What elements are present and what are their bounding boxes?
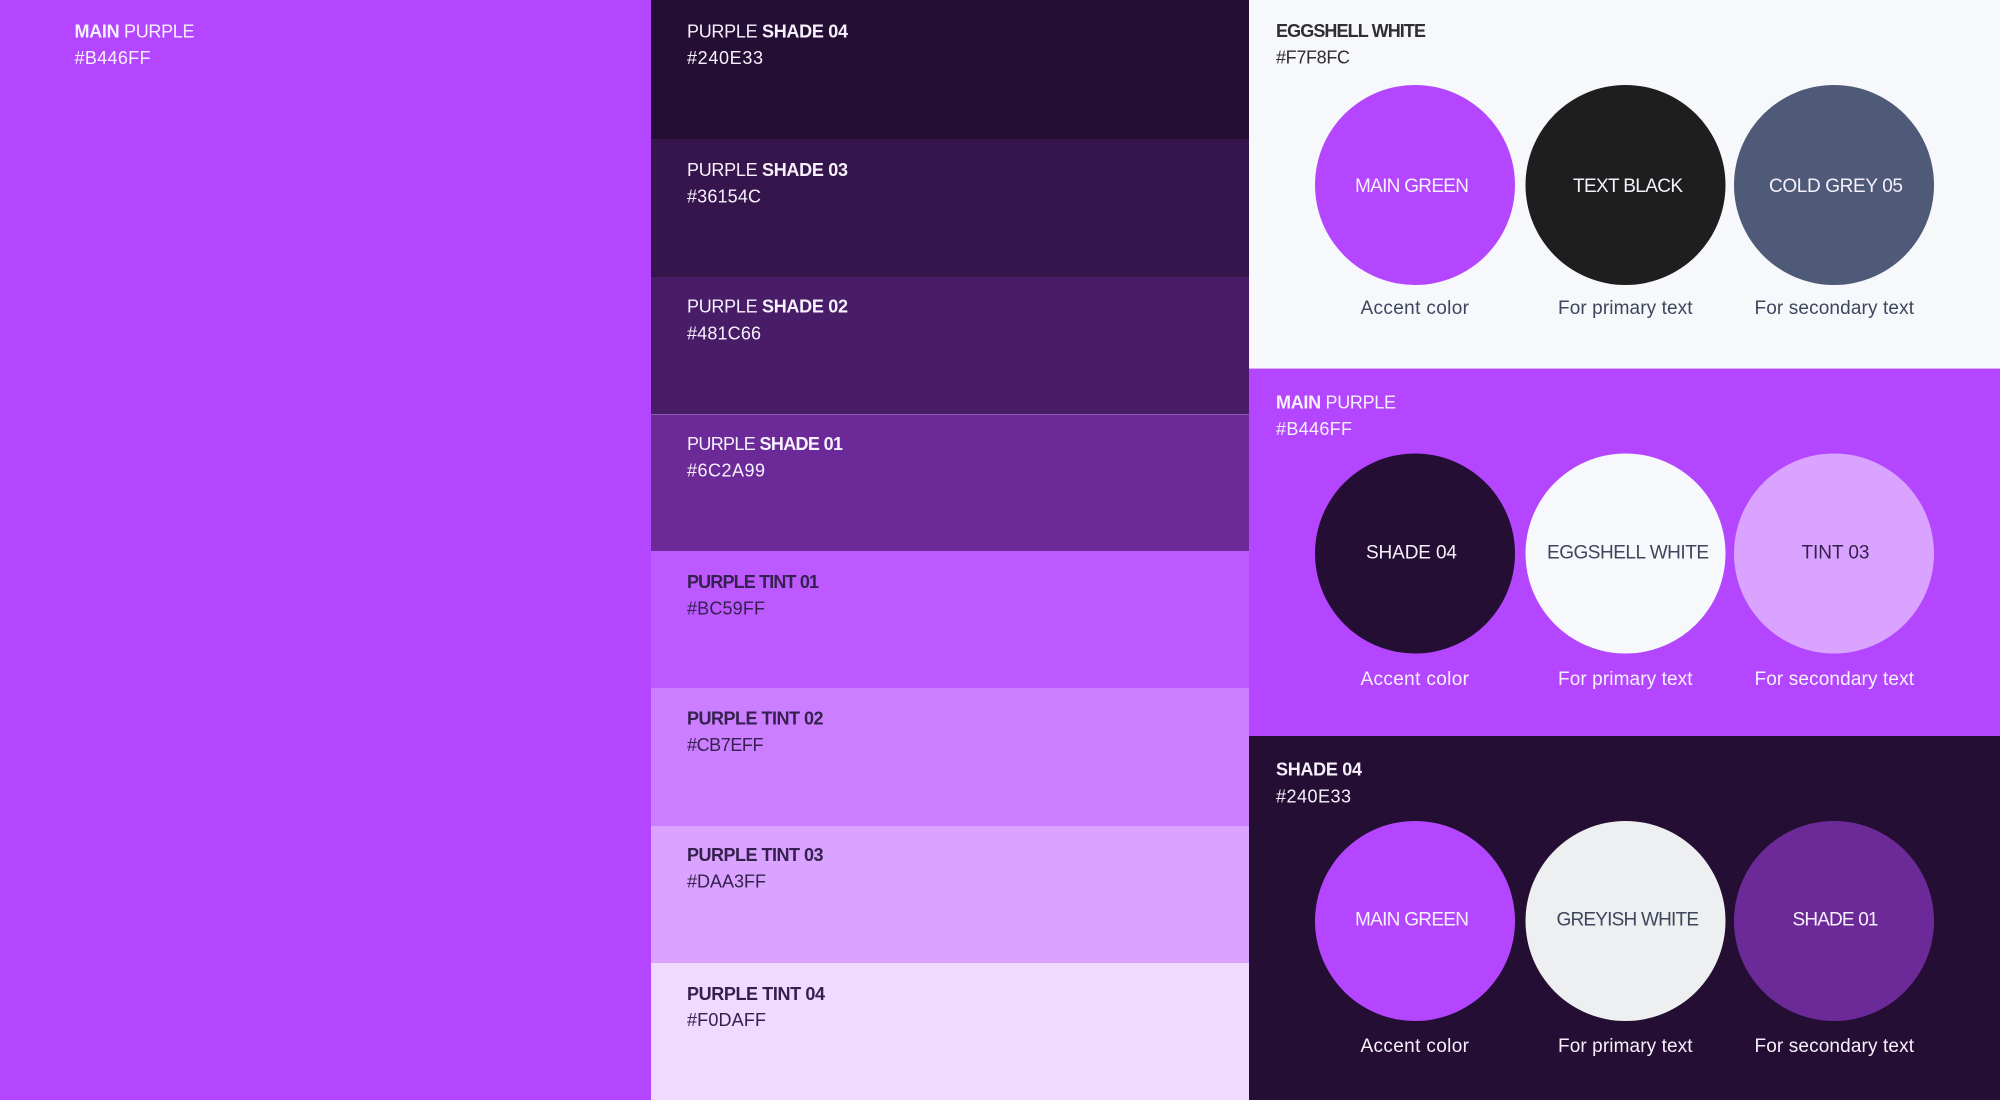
swatch: purple shade 02 bbox=[651, 277, 1249, 414]
captions: Accent color bbox=[1360, 669, 1470, 690]
swatch: purple tint 02: #CB7EFF bbox=[687, 735, 764, 755]
circle: shade 04: SHADE 04 bbox=[1366, 542, 1457, 564]
panel: main purple: MAIN PURPLE bbox=[74, 22, 194, 42]
captions bbox=[1360, 1036, 1915, 1057]
swatch: purple tint 04: #F0DAFF bbox=[687, 1010, 766, 1030]
heading: shade 04 bbox=[1276, 760, 1362, 806]
captions: For primary text bbox=[1558, 669, 1693, 690]
circle: greyish white: GREYISH WHITE bbox=[1556, 910, 1699, 930]
swatch: purple tint 01: PURPLE TINT 01 bbox=[687, 572, 819, 592]
swatch: purple shade 04: PURPLE SHADE 04 bbox=[687, 22, 848, 42]
swatch: purple tint 04: PURPLE TINT 04 bbox=[687, 984, 825, 1004]
swatch: purple tint 01: #BC59FF bbox=[687, 598, 765, 618]
circle: eggshell white: EGGSHELL WHITE bbox=[1547, 542, 1709, 564]
swatch: purple shade 03 bbox=[651, 139, 1249, 277]
circle: main green bbox=[1315, 821, 1515, 1021]
circle: shade 01 bbox=[1734, 821, 1934, 1021]
heading: main purple: MAIN PURPLE bbox=[1276, 392, 1396, 412]
circle: cold grey 05 bbox=[1734, 85, 1934, 285]
heading: eggshell white: EGGSHELL WHITE bbox=[1276, 21, 1426, 41]
swatch: purple shade 02: #481C66 bbox=[687, 324, 761, 344]
captions bbox=[1360, 669, 1915, 690]
circle: main green bbox=[1315, 85, 1515, 285]
circle: tint 03: TINT 03 bbox=[1802, 542, 1870, 564]
heading: main purple: #B446FF bbox=[1276, 419, 1352, 439]
swatch: purple tint 03: #DAA3FF bbox=[687, 872, 766, 892]
swatch: purple shade 01: #6C2A99 bbox=[687, 460, 765, 480]
heading: eggshell white: #F7F8FC bbox=[1276, 48, 1350, 68]
swatch: purple shade 02: PURPLE SHADE 02 bbox=[687, 296, 848, 316]
swatch: purple tint 02 bbox=[651, 688, 1249, 826]
captions: For primary text bbox=[1558, 1036, 1693, 1057]
panel: main purple: #B446FF bbox=[74, 48, 150, 68]
heading: shade 04: SHADE 04 bbox=[1276, 760, 1362, 780]
panel: shade 04 pairing bbox=[1249, 736, 2000, 1100]
swatch: purple tint 02: PURPLE TINT 02 bbox=[687, 708, 824, 728]
swatch: purple shade 03: #36154C bbox=[687, 186, 761, 206]
circle: shade 01: SHADE 01 bbox=[1792, 910, 1878, 930]
circle: tint 03 bbox=[1734, 454, 1934, 654]
circle: main green: MAIN GREEN bbox=[1355, 176, 1469, 197]
circle: cold grey 05: COLD GREY 05 bbox=[1769, 176, 1903, 197]
swatch: purple tint 01 bbox=[651, 551, 1249, 688]
panel: main purple pairing bbox=[1249, 368, 2000, 736]
captions: For secondary text bbox=[1754, 298, 1915, 319]
swatch: purple tint 03: PURPLE TINT 03 bbox=[687, 845, 824, 865]
heading: eggshell white bbox=[1276, 21, 1426, 68]
circle: text black: TEXT BLACK bbox=[1573, 176, 1683, 197]
swatch: purple tint 04 bbox=[651, 963, 1249, 1100]
circle: greyish white bbox=[1526, 821, 1726, 1021]
circle: main green: MAIN GREEN bbox=[1355, 910, 1469, 930]
captions: Accent color bbox=[1360, 298, 1470, 319]
captions: For secondary text bbox=[1754, 1036, 1915, 1057]
heading: main purple bbox=[1276, 392, 1396, 439]
captions: For secondary text bbox=[1754, 669, 1915, 690]
swatch: purple shade 01: PURPLE SHADE 01 bbox=[687, 434, 843, 454]
heading: shade 04: #240E33 bbox=[1276, 786, 1351, 806]
circle: shade 04 bbox=[1315, 454, 1515, 654]
swatch: purple shade 04 bbox=[651, 0, 1249, 139]
swatch: purple shade 03: PURPLE SHADE 03 bbox=[687, 160, 848, 180]
panel: main purple bbox=[0, 0, 651, 1100]
captions: For primary text bbox=[1558, 298, 1693, 319]
swatch: purple shade 04: #240E33 bbox=[687, 48, 763, 68]
swatch: purple tint 03 bbox=[651, 826, 1249, 963]
panel: eggshell white bbox=[1249, 0, 2000, 369]
circle: text black bbox=[1526, 85, 1726, 285]
circle: eggshell white bbox=[1526, 454, 1726, 654]
captions: Accent color bbox=[1360, 1036, 1470, 1057]
captions bbox=[1360, 298, 1915, 319]
swatch: purple shade 01 bbox=[651, 414, 1249, 551]
